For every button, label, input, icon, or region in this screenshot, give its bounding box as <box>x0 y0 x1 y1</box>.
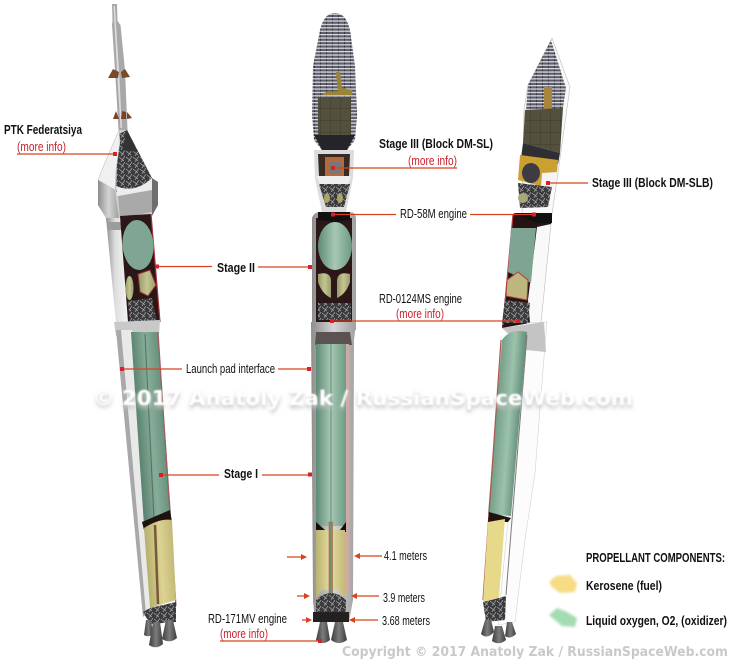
label: Stage II: Stage II <box>217 261 255 275</box>
legend: propellant components <box>549 551 727 628</box>
engine nozzles <box>481 620 516 643</box>
dimension: 3.9 meters <box>297 591 425 605</box>
payload fairing and spacecraft <box>312 13 357 150</box>
label: RD-171MV engine <box>208 612 322 643</box>
label: PTK Federatsiya <box>4 123 117 156</box>
PTK capsule and fairing <box>98 130 158 218</box>
label: RD-171MV engine: (more info) <box>220 627 268 641</box>
stage I with propellant tanks <box>483 322 547 625</box>
dimension: 4.1 meters: 4.1 meters <box>384 549 427 563</box>
label: RD-58M engine <box>331 207 536 221</box>
label: Stage I: Stage I <box>224 467 258 481</box>
fairing shell and net <box>520 38 570 323</box>
label: RD-0124MS engine: (more info) <box>396 307 444 321</box>
stage II cutaway <box>312 212 356 330</box>
label: Stage III Block DM-SL <box>331 137 493 170</box>
stage I with propellant tanks <box>114 320 176 624</box>
stage III Block DM-SL <box>314 150 354 212</box>
dimension: 3.68 meters: 3.68 meters <box>382 614 430 628</box>
dimension: 3.68 meters <box>302 614 430 628</box>
engine nozzles <box>316 622 347 643</box>
stage I with propellant tanks <box>311 322 356 622</box>
legend text: kerosene: Kerosene (fuel) <box>586 579 662 593</box>
label: RD-171MV engine: RD-171MV engine <box>208 612 287 626</box>
dimension: 3.9 meters: 3.9 meters <box>383 591 425 605</box>
stage II cutaway <box>502 213 552 328</box>
label: RD-58M engine: RD-58M engine <box>400 207 467 221</box>
label: Stage I <box>159 467 312 481</box>
label: Launch pad interface: Launch pad interface <box>186 362 275 376</box>
label: Stage II <box>155 261 312 275</box>
stage III Block DM-SLB <box>518 155 558 208</box>
watermark: © 2017 Anatoly Zak / RussianSpaceWeb.com <box>93 389 633 413</box>
label: PTK Federatsiya: (more info) <box>17 140 66 154</box>
label: Launch pad interface <box>120 362 311 376</box>
label: Stage III Block DM-SLB <box>546 176 713 190</box>
label: PTK Federatsiya: PTK Federatsiya <box>4 123 83 137</box>
watermark: © 2017 Anatoly Zak / RussianSpaceWeb.com <box>93 386 633 410</box>
escape tower <box>108 4 132 130</box>
rocket: Soyuz-5 with PTK Federatsiya <box>98 4 177 647</box>
label: RD-0124MS engine: RD-0124MS engine <box>379 292 462 306</box>
legend swatch: liquid oxygen <box>549 608 577 627</box>
dimension: 4.1 meters <box>287 549 427 563</box>
rocket: Soyuz-5 with Block DM-SL <box>311 13 357 643</box>
stage II cutaway <box>106 214 160 323</box>
engine nozzles <box>144 620 177 647</box>
spacecraft <box>521 108 563 164</box>
legend swatch: kerosene <box>549 575 577 593</box>
label: Stage III Block DM-SL: (more info) <box>408 154 457 168</box>
label: RD-0124MS engine <box>330 292 520 323</box>
label: Stage III Block DM-SL: Stage III (Block DM-SL) <box>379 137 493 151</box>
rocket: Soyuz-5 with Block DM-SLB <box>481 38 570 643</box>
